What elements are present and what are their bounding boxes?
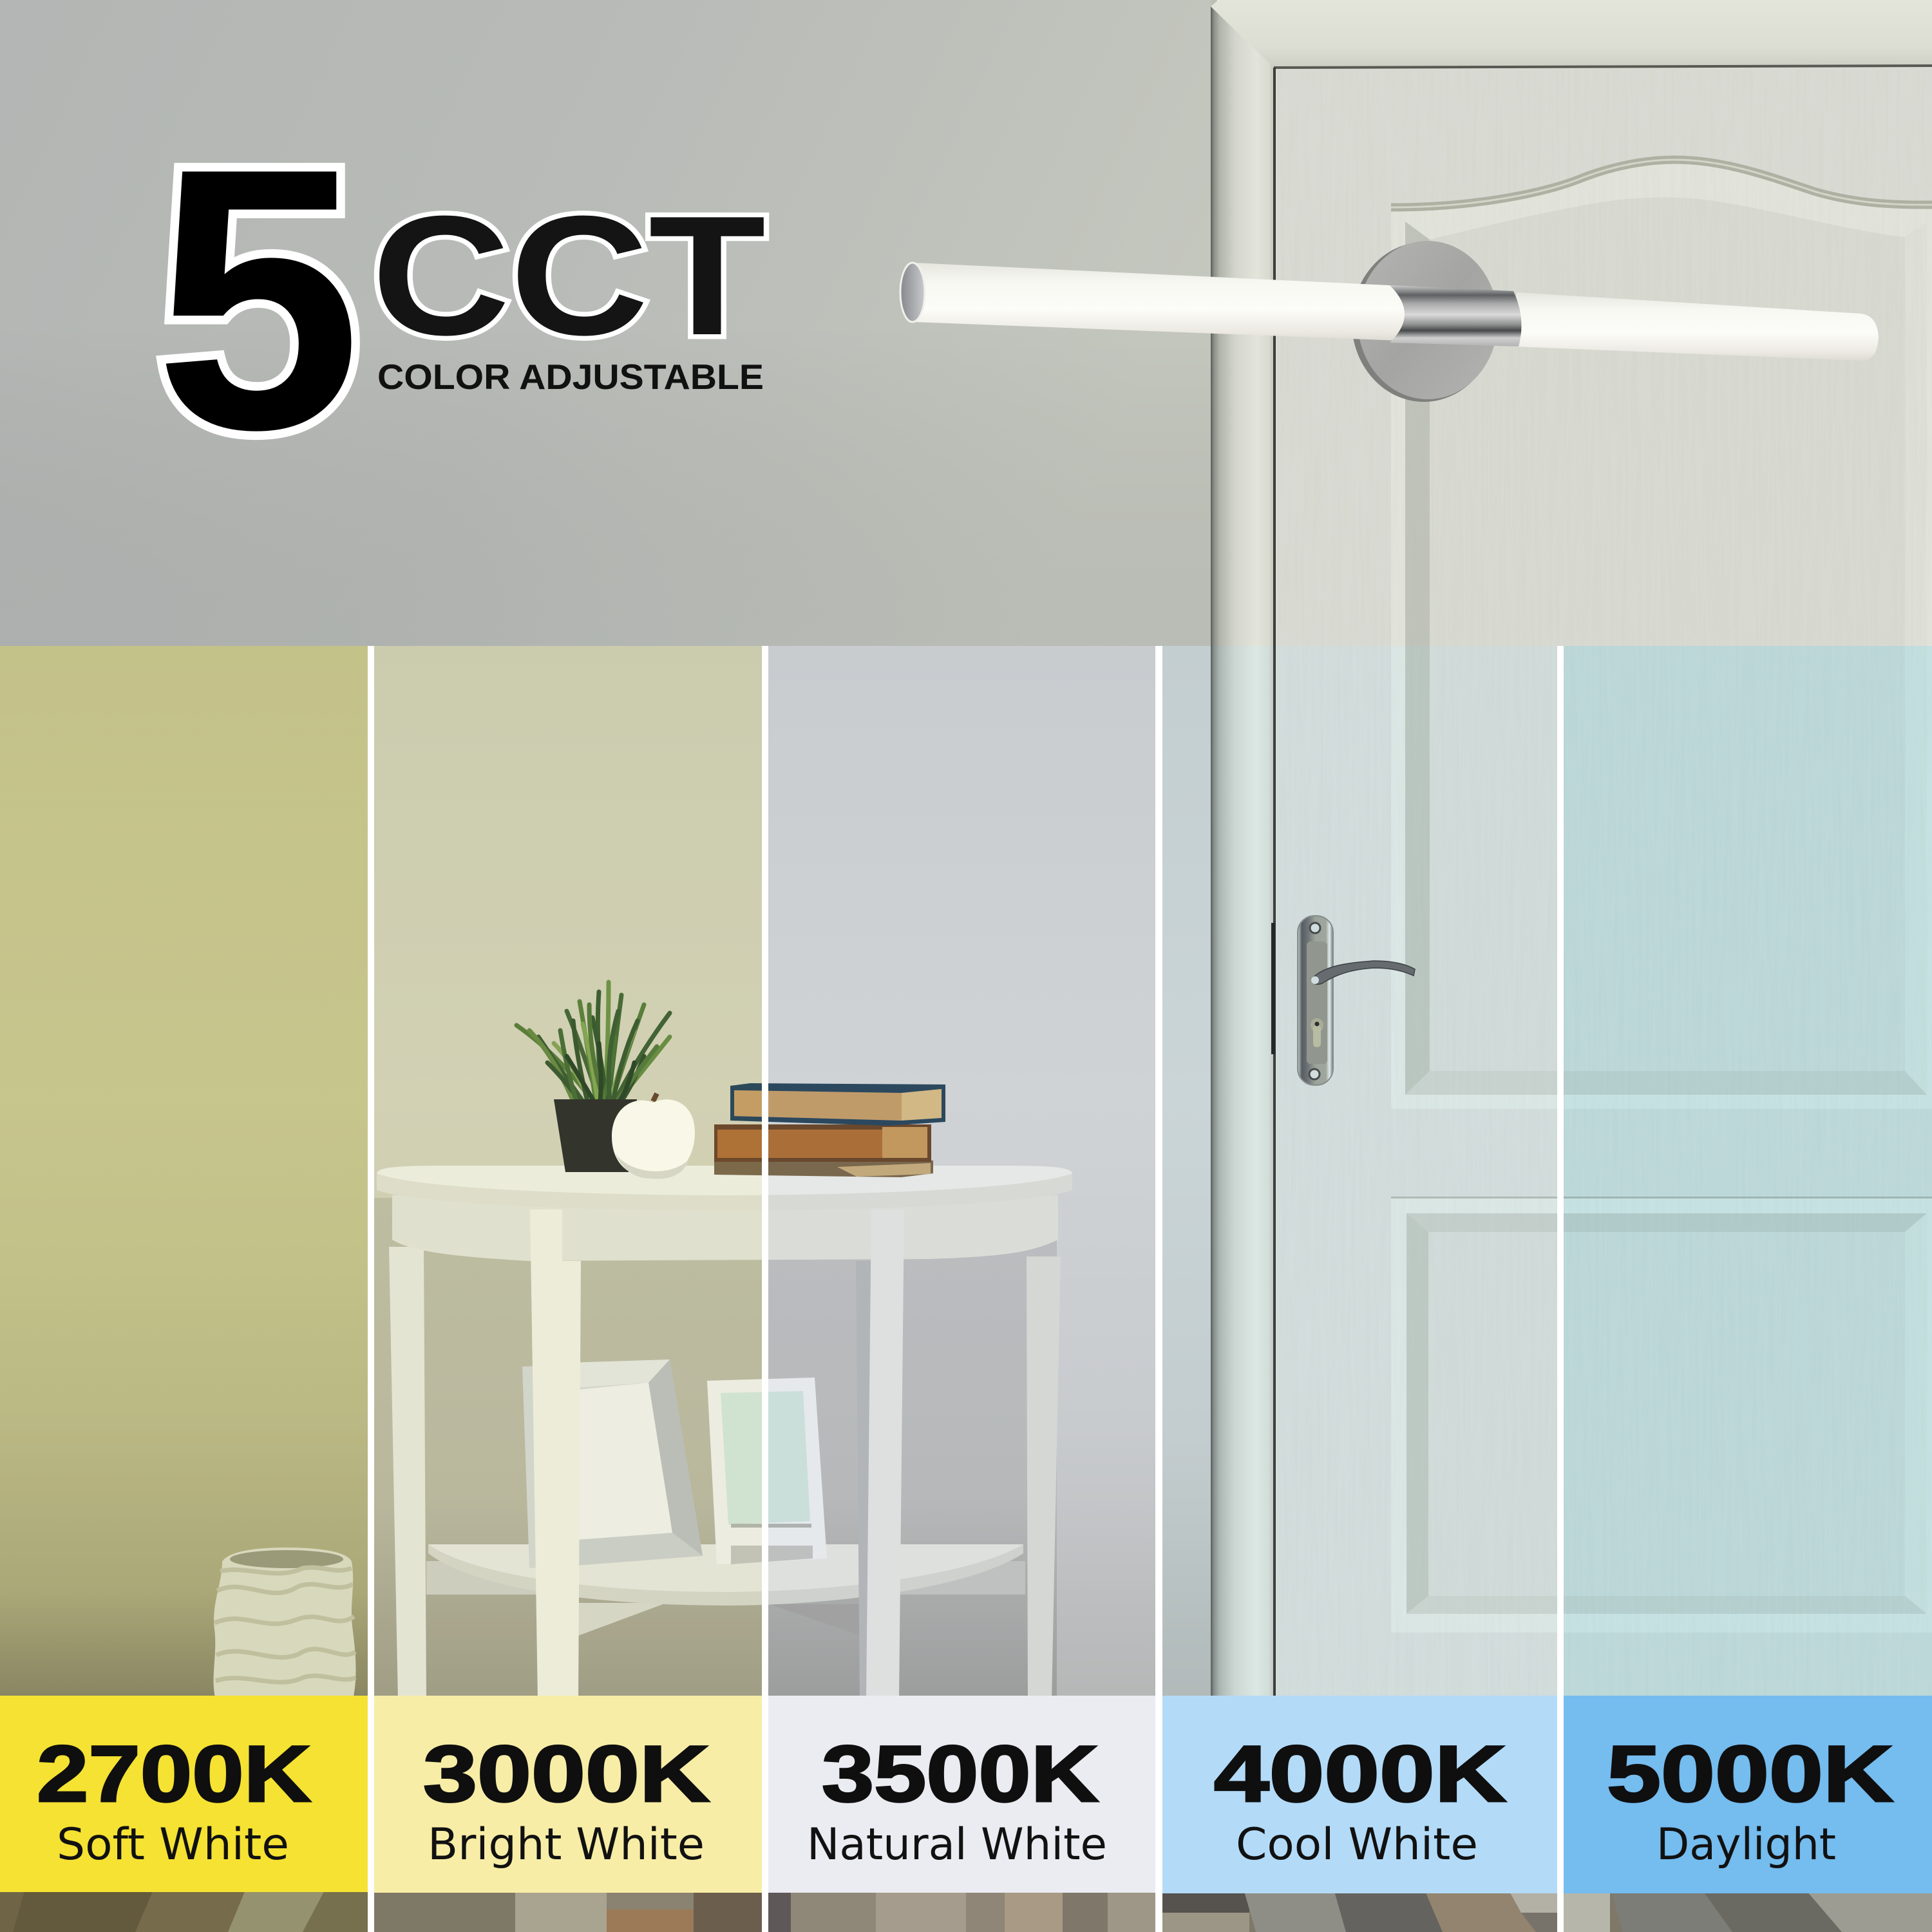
colour tint: 2700K strip: [0, 646, 368, 1696]
door leaf: [1274, 67, 1932, 1700]
label: 3500K Natural White: [768, 1696, 1155, 1893]
wall-only warm tint: 3000K strip: [374, 646, 762, 1702]
label: 4000K Cool White: Cool White: [1236, 1819, 1478, 1870]
subtitle: COLOR ADJUSTABLE: [377, 357, 764, 397]
door handle: [1271, 916, 1415, 1085]
background: lit wall behind colour strips: [0, 646, 1217, 1702]
left frosted tube: [900, 263, 1417, 341]
title: 5 CCT color adjustable: [155, 91, 766, 507]
label: 2700K Soft White: 2700K: [37, 1730, 311, 1819]
label: 2700K Soft White: Soft White: [57, 1819, 289, 1870]
apple ornament: [612, 1094, 695, 1179]
vase: [214, 1548, 356, 1700]
wood grain texture: [1278, 70, 1932, 1699]
middle book: [714, 1124, 931, 1162]
left outer leg: [389, 1247, 426, 1700]
upper door panel: [1391, 157, 1932, 1109]
label: 2700K Soft White: [0, 1696, 368, 1892]
table top: [377, 1166, 1072, 1211]
label: 5000K Daylight: 5000K: [1607, 1730, 1893, 1819]
label: 4000K Cool White: 4000K: [1214, 1730, 1506, 1819]
wall sconce light fixture: [900, 241, 1879, 402]
right frosted tube: [1513, 292, 1879, 361]
label: 3500K Natural White: Natural White: [807, 1819, 1107, 1870]
potted plant: [516, 982, 670, 1172]
label: 3500K Natural White: 3500K: [822, 1730, 1099, 1819]
plant pot: [554, 1099, 637, 1172]
label: 4000K Cool White: [1162, 1696, 1557, 1893]
label: 5000K Daylight: [1564, 1696, 1932, 1893]
centre right leg: [856, 1209, 904, 1700]
colour tint: top band door: [1211, 0, 1932, 646]
lower door panel: [1391, 1197, 1932, 1633]
right outer leg: [1027, 1256, 1061, 1700]
white strip dividers: [368, 646, 1564, 1932]
picture frame small: [707, 1378, 827, 1564]
label: 3000K Bright White: 3000K: [423, 1730, 710, 1819]
under shelf braces: [426, 1561, 1025, 1636]
stack of books: [714, 1083, 945, 1177]
door lintel: [1211, 0, 1932, 68]
keyhole: [1311, 1018, 1323, 1032]
console table scene: [377, 982, 1072, 1700]
picture frame large: [522, 1359, 703, 1568]
colour tint: 3500K strip: [768, 646, 1155, 1696]
label: 3000K Bright White: Bright White: [428, 1819, 705, 1870]
lower shelf: [428, 1544, 1023, 1605]
colour tint: 5000K strip: [1564, 646, 1932, 1696]
bottom book: [714, 1160, 933, 1177]
centre left leg: [530, 1209, 581, 1700]
shadow on wall under table: [374, 1198, 1057, 1697]
table apron: [392, 1195, 1058, 1261]
big numeral 5: 5: [155, 91, 361, 507]
latch plate: [1271, 923, 1275, 1054]
door and frame photo: [1211, 0, 1932, 1700]
CCT heading: CCT: [372, 180, 766, 370]
label: 5000K Daylight: Daylight: [1656, 1819, 1836, 1870]
colour tint: 3000K strip: [374, 646, 762, 1696]
background: grey wall upper band: [0, 0, 1217, 646]
lever: [1312, 961, 1415, 984]
wood floor: [0, 1887, 1932, 1932]
colour tint: 4000K strip: [1162, 646, 1557, 1696]
door trim: [1211, 6, 1274, 1700]
back plate: [1298, 916, 1333, 1085]
mounting disc: [1352, 241, 1498, 402]
label: 3000K Bright White: [374, 1696, 762, 1893]
metal collar: [1390, 285, 1521, 346]
top book: [730, 1083, 945, 1126]
